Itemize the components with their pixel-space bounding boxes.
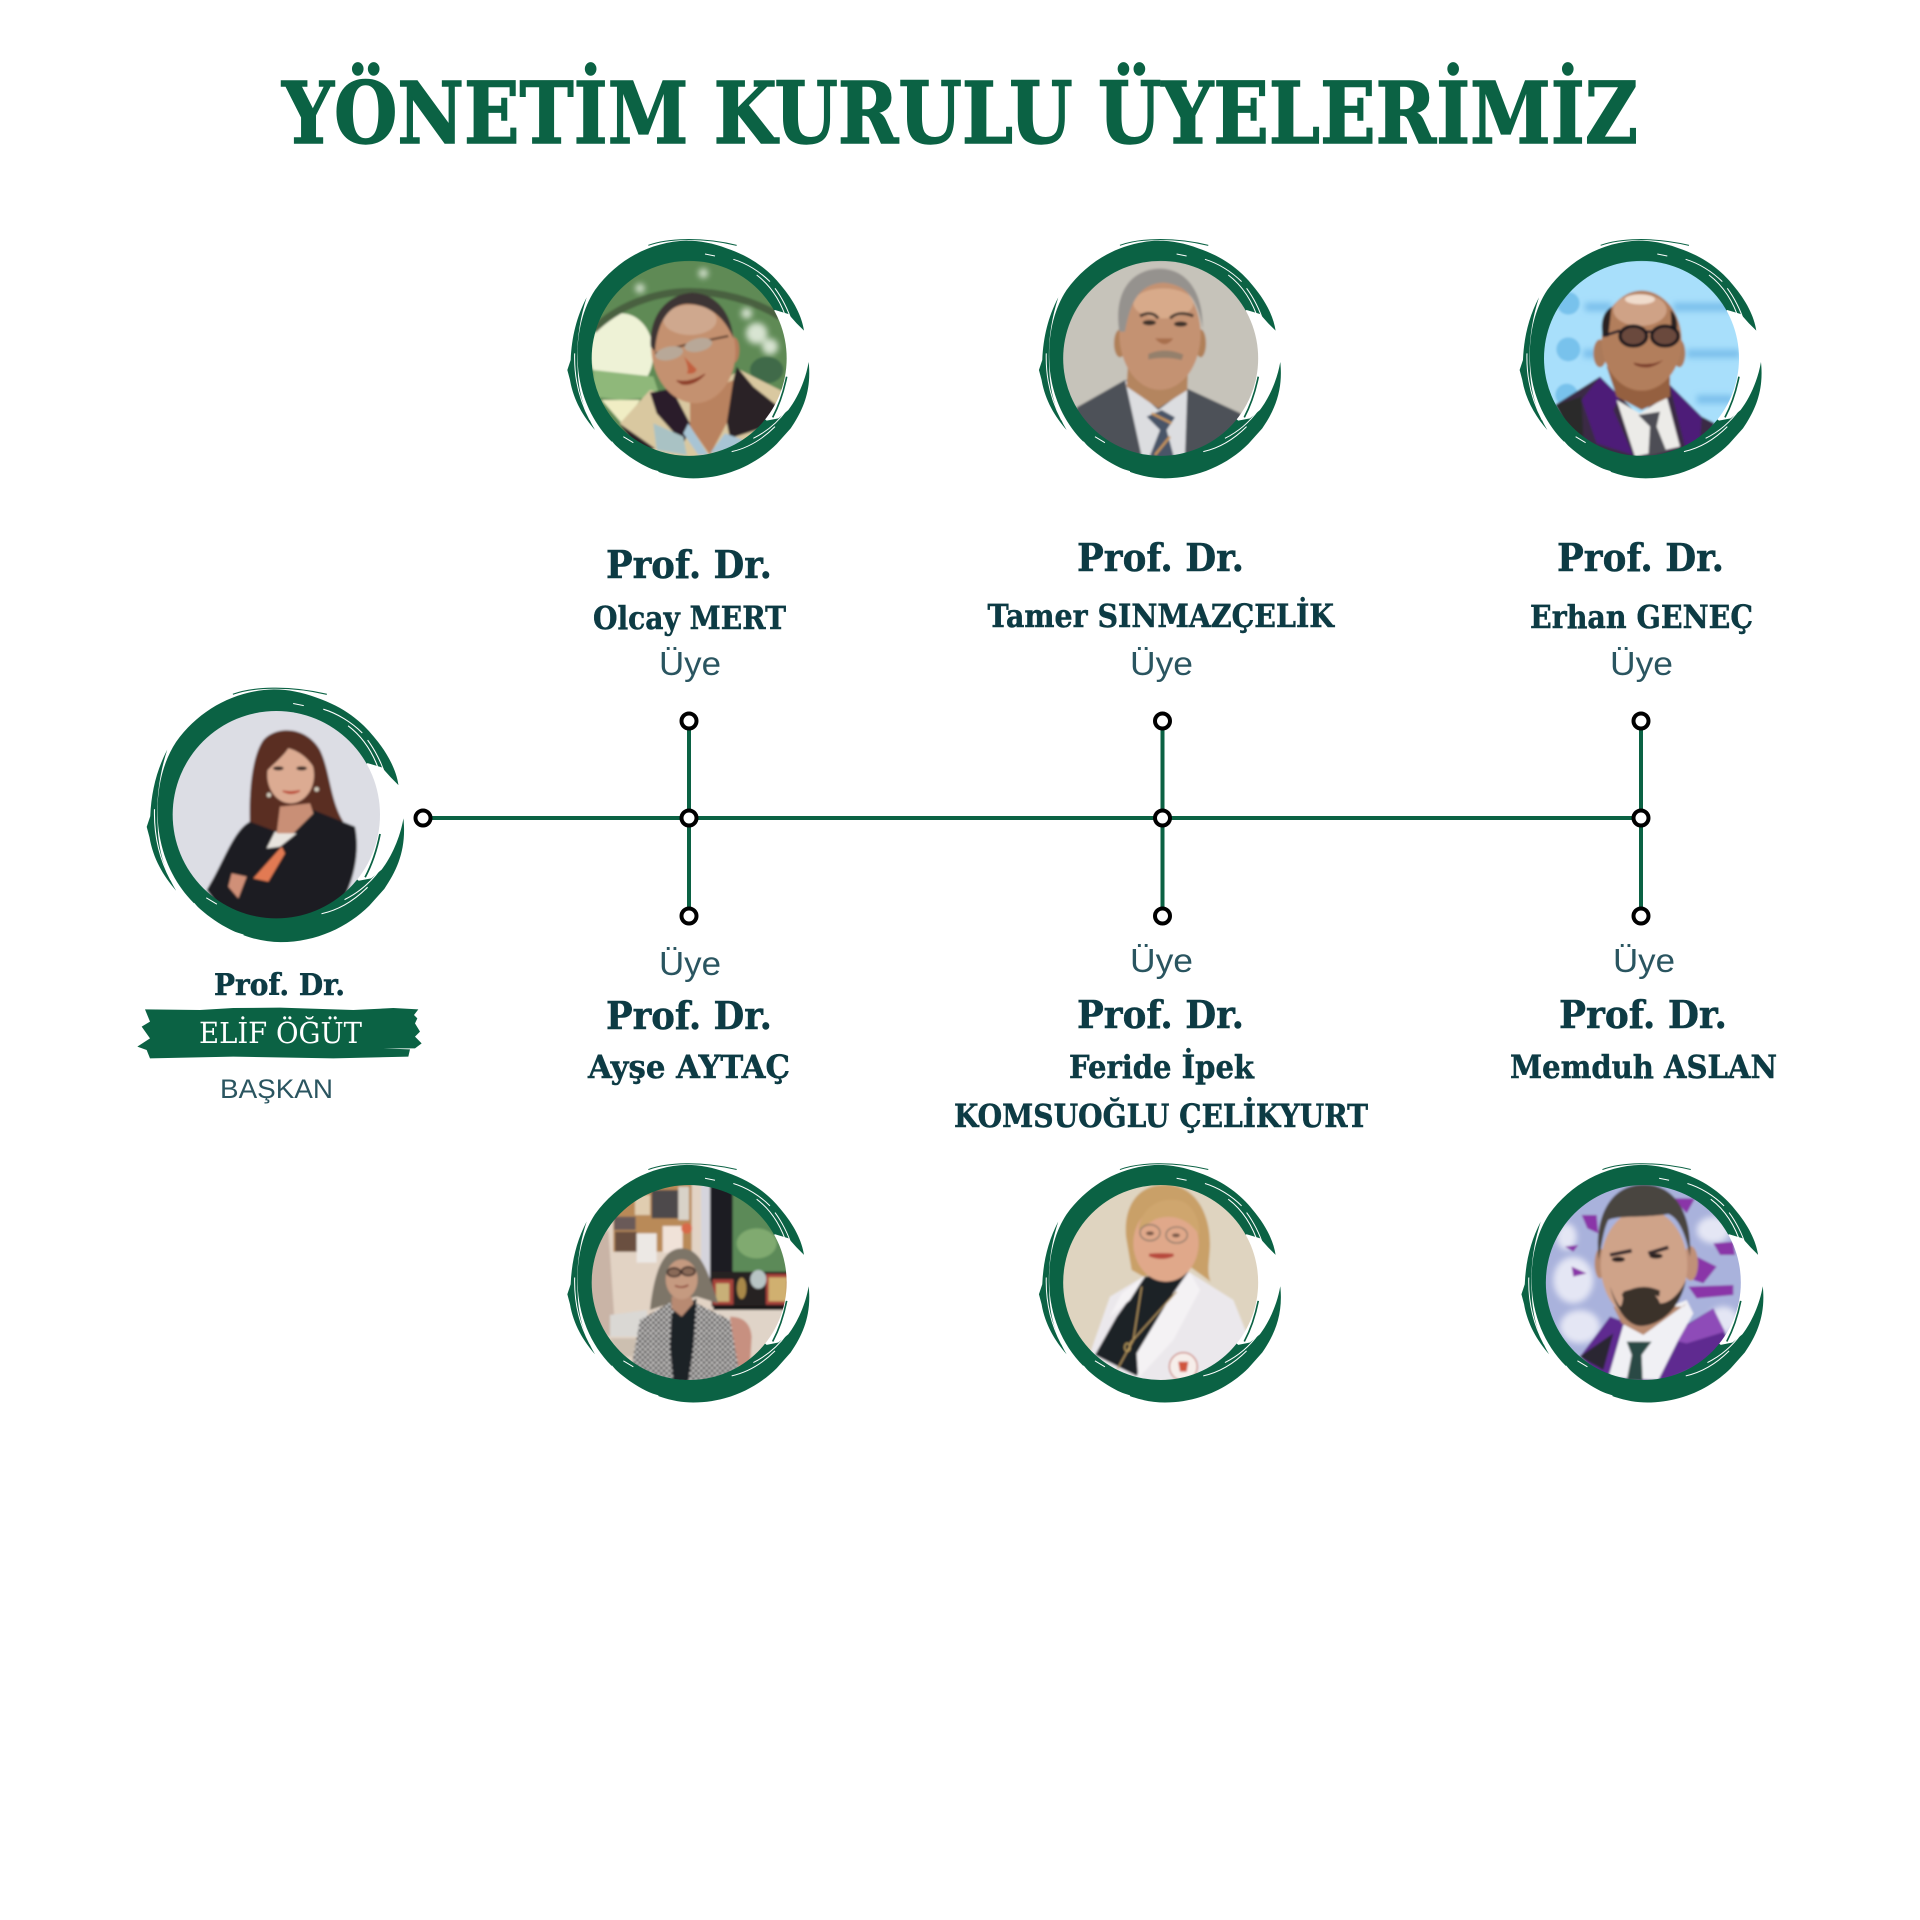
text: member name block: KOMSUOĞLU ÇELİKYURT: [954, 1097, 1368, 1135]
icon: brush ring: [1521, 1164, 1763, 1403]
text: member name block: Üye: [1613, 942, 1675, 979]
text: member name block: Üye: [1130, 645, 1193, 682]
text: member name block: Prof. Dr.: [1557, 535, 1724, 580]
connector timeline: [416, 714, 1648, 924]
banner: chair name: [137, 1008, 422, 1058]
panel: member Ayşe Aytaç: [567, 945, 809, 1403]
panel: member Tamer Sınmazçelik: [988, 240, 1335, 682]
text: member name block: Erhan GENEÇ: [1530, 598, 1753, 636]
panel: member Erhan Geneç: [1520, 240, 1762, 682]
text: member name block: Üye: [659, 645, 721, 682]
panel: chair Elif Öğüt: [137, 688, 422, 1104]
text: member name block: [1510, 942, 1777, 1086]
text: member name block: [593, 542, 786, 682]
portrait: Olcay Mert: [590, 260, 790, 460]
portrait: Erhan Geneç: [1540, 260, 1743, 460]
portrait: Elif Öğüt: [172, 711, 380, 918]
panel: member Feride İpek Komsuoğlu Çelikyurt: [954, 942, 1368, 1403]
text: member name block: Tamer SINMAZÇELİK: [988, 597, 1335, 635]
heading: chair title: Prof. Dr.: [214, 968, 345, 1003]
text: member name block: Feride İpek: [1069, 1048, 1255, 1086]
text: member name block: Prof. Dr.: [606, 542, 772, 587]
text: member name block: Üye: [1610, 645, 1673, 682]
text: member name block: [1530, 535, 1753, 682]
text: member name block: [988, 535, 1335, 682]
text: member name block: Üye: [1130, 942, 1193, 979]
title: YÖNETİM KURULU ÜYELERİMİZ: [281, 63, 1638, 164]
text: chair role: BAŞKAN: [220, 1074, 333, 1104]
portrait: Ayşe Aytaç: [590, 1183, 792, 1383]
text: member name block: Prof. Dr.: [1559, 992, 1727, 1037]
panel: member Memduh Aslan: [1510, 942, 1777, 1403]
text: member name block: Memduh ASLAN: [1510, 1048, 1777, 1086]
banner: chair name: ELİF ÖĞÜT: [199, 1014, 363, 1050]
text: member name block: Üye: [659, 945, 721, 982]
text: member name block: [587, 945, 790, 1086]
icon: brush ring chair: [147, 688, 404, 942]
icon: brush ring: [567, 240, 809, 478]
portrait: Memduh Aslan: [1543, 1183, 1743, 1383]
portrait: Feride İpek Komsuoğlu Çelikyurt: [1060, 1183, 1263, 1385]
text: member name block: Prof. Dr.: [606, 993, 772, 1038]
portrait: Tamer Sınmazçelik: [1060, 260, 1263, 460]
text: member name block: Prof. Dr.: [1077, 992, 1244, 1037]
icon: brush ring: [1039, 1164, 1281, 1403]
icon: brush ring: [1520, 240, 1762, 478]
text: member name block: Ayşe AYTAÇ: [587, 1048, 790, 1086]
text: member name block: [954, 942, 1368, 1135]
text: member name block: Prof. Dr.: [1077, 535, 1244, 580]
icon: brush ring: [567, 1164, 809, 1403]
icon: brush ring: [1039, 240, 1281, 478]
panel: member Olcay Mert: [567, 240, 809, 682]
text: member name block: Olcay MERT: [593, 599, 786, 637]
